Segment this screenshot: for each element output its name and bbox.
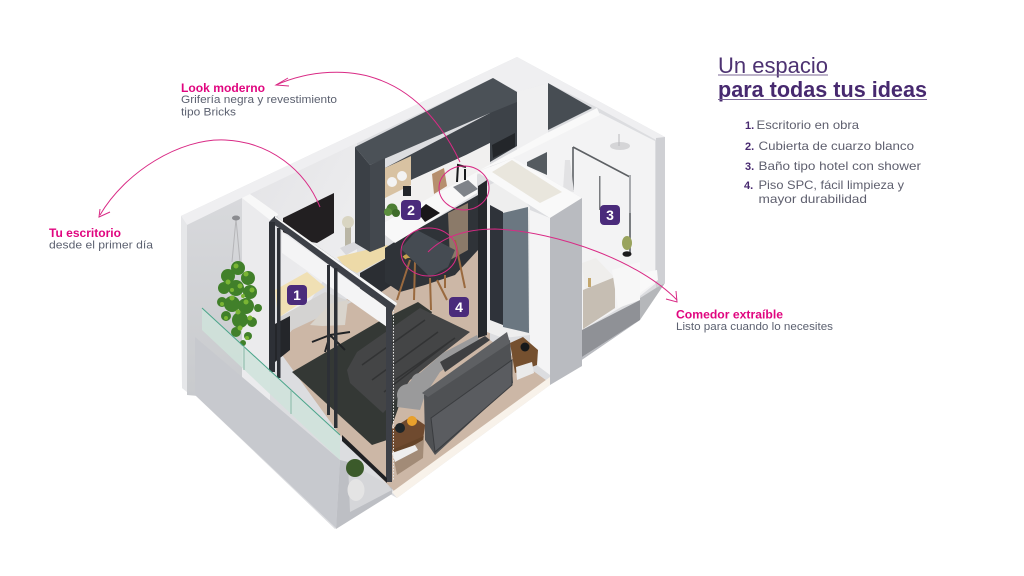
small kitchen plant [384, 204, 400, 217]
feature list [744, 118, 921, 206]
bathroom plant [622, 236, 632, 257]
kitchen lower cabinets [385, 195, 478, 292]
television [283, 193, 334, 243]
kitchen backsplash [385, 143, 490, 222]
feature list: Baño tipo hotel con shower [758, 159, 921, 173]
feature list: 3. [745, 161, 754, 173]
badge 2 [401, 200, 421, 220]
feature list: 1. [745, 120, 754, 132]
label: tu escritorio [49, 228, 154, 252]
feature list: 4. [744, 180, 753, 192]
label: look moderno [181, 83, 337, 118]
callout line: tu escritorio [99, 140, 320, 217]
badge 3: 3 [606, 207, 614, 223]
label: tu escritorio: desde el primer día [49, 240, 154, 252]
door frame and lintel [269, 216, 397, 483]
stools [397, 240, 465, 310]
desk chair [310, 300, 350, 352]
feature list: Piso SPC, fácil limpieza y [758, 178, 904, 192]
badge 4: 4 [455, 299, 463, 315]
outer shell [181, 57, 665, 529]
badge 3 [600, 205, 620, 225]
feature list: 2. [745, 141, 754, 153]
balcony floor and planter [336, 459, 392, 529]
bath partition shaft [477, 158, 582, 385]
closet [478, 178, 530, 338]
callout line: comedor extraible [401, 228, 677, 302]
hanging plant [217, 216, 262, 346]
vanity [582, 258, 615, 329]
badge 1: 1 [293, 287, 301, 303]
pillows [397, 335, 490, 410]
balcony parapet [195, 337, 340, 528]
kitchen soffit and cabinets [355, 78, 517, 252]
callout line: look moderno [276, 72, 489, 210]
label: comedor extraible: Listo para cuando lo necesites [676, 321, 834, 333]
label: look moderno: Look moderno [181, 83, 265, 95]
rear closet panel [517, 83, 548, 165]
toilet [612, 262, 640, 308]
label: look moderno: tipo Bricks [181, 106, 237, 118]
isometric apartment model [181, 57, 665, 529]
feature list: mayor durabilidad [758, 192, 867, 206]
sink [453, 180, 478, 197]
bathroom walls and fixtures [480, 108, 665, 368]
title: Un espacio [718, 53, 828, 78]
title [718, 53, 927, 102]
left nightstand [390, 416, 425, 475]
feature list: Escritorio en obra [756, 118, 859, 132]
label: comedor extraible [676, 310, 834, 333]
label: tu escritorio: Tu escritorio [49, 228, 121, 240]
wood fridge panel [448, 203, 468, 260]
interior floor [277, 232, 550, 492]
glass railing [202, 308, 340, 460]
label: look moderno: Grifería negra y revestimiento [181, 94, 337, 106]
rug [292, 302, 432, 445]
faucet [457, 165, 466, 182]
badge 2: 2 [407, 202, 415, 218]
wall under desk [278, 292, 352, 340]
wood shelf with crockery [385, 156, 411, 198]
label: comedor extraible: Comedor extraíble [676, 310, 783, 322]
desk decor vase and books [340, 216, 361, 255]
cutting boards [432, 168, 447, 194]
sofa bed [422, 332, 513, 455]
cooktop [417, 204, 440, 222]
badge 1 [287, 285, 307, 305]
title: para todas tus ideas [718, 77, 927, 102]
feature list: Cubierta de cuarzo blanco [758, 139, 914, 153]
right nightstand [510, 337, 538, 380]
bed duvet [347, 308, 470, 413]
balcony walls [187, 194, 280, 400]
badge 4 [449, 297, 469, 317]
shower screen and head [563, 134, 631, 255]
extendable dining table [402, 230, 455, 277]
back wall of desk area [250, 143, 357, 340]
countertop [385, 172, 477, 243]
floor edge [392, 377, 550, 498]
desk [273, 245, 395, 362]
